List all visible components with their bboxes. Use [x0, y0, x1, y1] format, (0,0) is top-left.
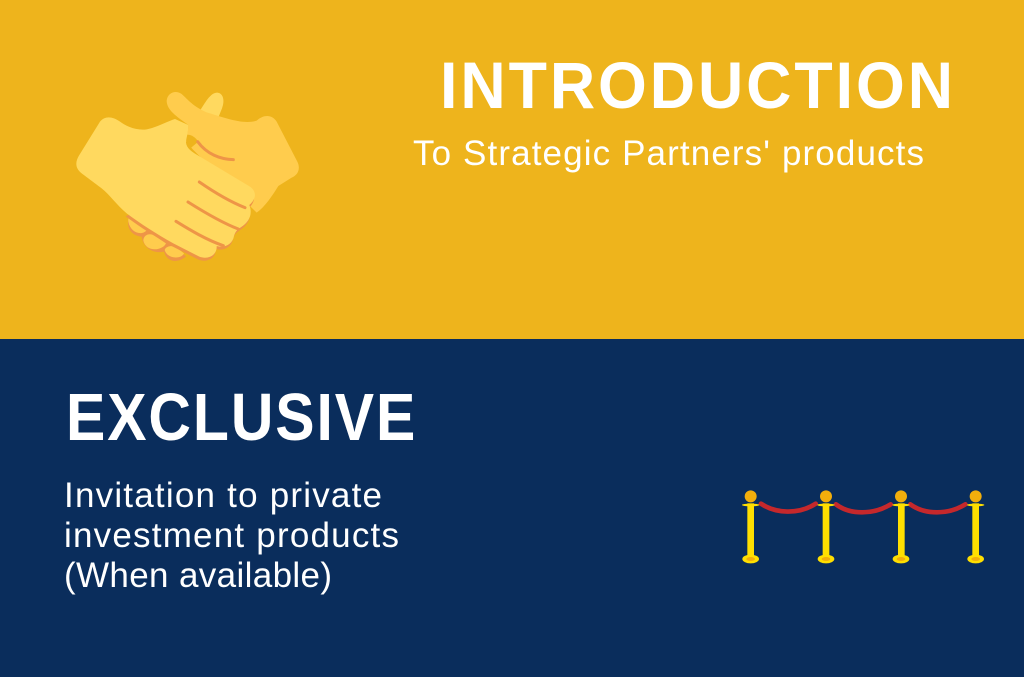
panel: introduction — [0, 0, 1024, 339]
icon: handshake — [76, 92, 299, 261]
text block: invitation — [64, 476, 399, 595]
left hand shadow — [126, 151, 254, 261]
lower fingers — [128, 215, 186, 261]
panel: exclusive — [0, 339, 1024, 677]
heading: exclusive: EXCLUSIVE — [66, 381, 415, 455]
text block: invitation: investment products — [64, 516, 399, 555]
text block: invitation: (When available) — [64, 556, 332, 595]
heading: introduction: INTRODUCTION — [440, 49, 953, 122]
subheading: strategic partners: To Strategic Partners' products — [413, 134, 924, 173]
icon: velvet rope stanchions — [742, 490, 984, 563]
text block: invitation: Invitation to private — [64, 476, 382, 515]
left hand — [76, 117, 255, 258]
